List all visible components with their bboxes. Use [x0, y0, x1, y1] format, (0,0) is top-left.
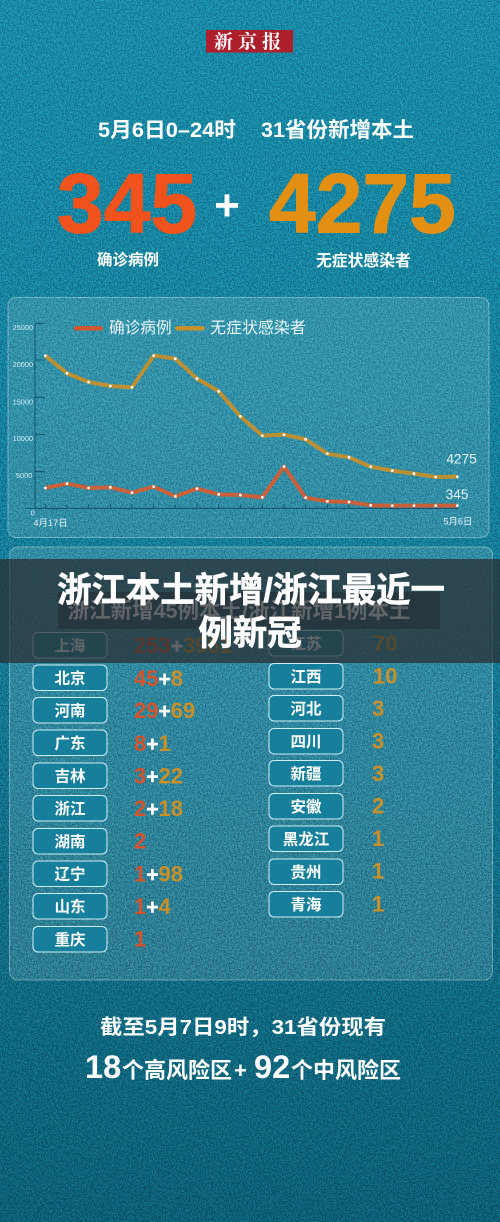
- x axis labels: 4月17日: [33, 518, 68, 528]
- row: 青海: 1: [372, 892, 384, 916]
- end label: 4275: 4275: [446, 451, 477, 466]
- plus sign: +: [214, 181, 240, 230]
- row: 河南: [33, 698, 195, 723]
- row: 四川: 3: [372, 728, 384, 754]
- row: 辽宁: 1+98: [134, 862, 183, 886]
- row: 广东: [33, 730, 171, 756]
- footer: risk area summary: [85, 1016, 401, 1085]
- row: 湖南: [33, 828, 146, 854]
- caption: asymptomatic: 无症状感染者: [316, 251, 411, 270]
- row: 重庆: 1: [134, 926, 146, 952]
- row: 北京: 北京: [54, 668, 86, 688]
- row: 上海: [33, 632, 232, 658]
- legend: 无症状感染者: [210, 319, 306, 337]
- row: 广东: 广东: [54, 734, 86, 752]
- row: 四川: 四川: [290, 734, 322, 751]
- row: 江西: 10: [373, 664, 397, 688]
- footer line 2: +: [234, 1058, 247, 1083]
- row: 上海: 253+3961: [134, 633, 232, 658]
- row: 山东: [33, 894, 172, 919]
- row: 安徽: 2: [372, 794, 384, 818]
- x axis labels: 5月6日: [443, 517, 472, 527]
- footer line 2: 个高风险区: [122, 1058, 232, 1083]
- y axis labels: 15000: [13, 397, 33, 406]
- row: 河南: 29+69: [134, 698, 195, 723]
- axes: [25, 323, 458, 508]
- panel: line chart background: [8, 298, 489, 538]
- heading: date and scope: 5月6日0–24时: [98, 119, 236, 142]
- y axis labels: 5000: [16, 471, 32, 480]
- row: 江苏: [269, 630, 397, 656]
- row: 黑龙江: 黑龙江: [283, 830, 330, 848]
- row: 江西: [269, 664, 397, 689]
- row: 河北: [269, 696, 384, 721]
- end label: 345: 345: [446, 487, 469, 502]
- footer line 2: 92: [254, 1049, 290, 1085]
- overlay title: 浙江本土新增/浙江最近一: [57, 572, 445, 610]
- row: 北京: 45+8: [134, 666, 183, 691]
- row: 贵州: 贵州: [290, 864, 322, 882]
- subtitle bar: [58, 592, 440, 629]
- line chart: [13, 319, 477, 528]
- row: 浙江: [33, 796, 183, 821]
- row: 黑龙江: 1: [372, 826, 384, 851]
- row: 山东: 山东: [54, 897, 86, 916]
- logo: 新京报: 新京报: [214, 27, 286, 54]
- row: 四川: [269, 728, 384, 754]
- row: 吉林: 吉林: [54, 768, 86, 786]
- row: 江西: 江西: [290, 668, 322, 686]
- row: 北京: [33, 665, 183, 691]
- heading: date and scope: [98, 118, 414, 142]
- number: confirmed 345: 345: [57, 156, 197, 250]
- row: 河北: 3: [372, 696, 384, 721]
- row: 安徽: [269, 794, 384, 819]
- row: 重庆: 重庆: [54, 930, 86, 949]
- right column: provinces with counts: [269, 630, 397, 917]
- y axis labels: [13, 323, 35, 518]
- row: 新疆: 3: [372, 761, 384, 786]
- line: confirmed: [45, 467, 457, 506]
- row: 江苏: 70: [373, 631, 397, 656]
- row: 吉林: [33, 763, 183, 788]
- number: asymptomatic 4275: 4275: [269, 156, 456, 250]
- row: 山东: 1+4: [134, 894, 172, 919]
- footer line 1: 截至5月7日9时，31省份现有: [100, 1016, 386, 1039]
- overlay title: 例新冠: [198, 615, 302, 653]
- row: 浙江: 2+18: [134, 796, 183, 821]
- y axis labels: 0: [31, 509, 35, 518]
- subtitle bar: 浙江新增45例本土/浙江新增1例本土: [68, 599, 410, 623]
- x axis labels: [33, 517, 472, 528]
- row: 湖南: 2: [134, 828, 146, 854]
- caption: confirmed cases: 确诊病例: [97, 250, 159, 269]
- row: 广东: 8+1: [134, 731, 171, 756]
- big numbers: confirmed plus asymptomatic: [57, 156, 456, 250]
- left column: provinces with confirmed and asymptomatic counts: [33, 632, 232, 952]
- row: 黑龙江: [269, 826, 384, 852]
- row: 湖南: 湖南: [54, 833, 86, 851]
- footer line 2: 个中风险区: [291, 1058, 401, 1083]
- heading: date and scope: 31省份新增本土: [261, 118, 414, 142]
- row: 青海: [269, 892, 384, 917]
- y axis labels: 20000: [13, 360, 33, 369]
- row: 新疆: 新疆: [290, 764, 322, 783]
- y axis labels: 25000: [13, 323, 33, 332]
- panel: province list background: [10, 547, 492, 980]
- row: 河北: 河北: [290, 700, 322, 718]
- row: 贵州: [269, 858, 384, 884]
- footer line 2: 18: [85, 1049, 121, 1085]
- legend: [76, 319, 306, 337]
- row: 浙江: 浙江: [54, 800, 86, 818]
- row: 辽宁: [33, 861, 183, 886]
- row: 辽宁: 辽宁: [54, 864, 86, 884]
- row: 河南: 河南: [54, 702, 86, 720]
- overlay title: [57, 572, 445, 653]
- row: 青海: 青海: [290, 896, 322, 914]
- row: 上海: 上海: [54, 637, 86, 655]
- legend: 确诊病例: [109, 319, 172, 337]
- line: asymptomatic: [45, 356, 457, 477]
- y axis labels: 10000: [13, 434, 33, 443]
- row: 新疆: [269, 760, 384, 786]
- overlay band: [0, 559, 500, 663]
- row: 江苏: 江苏: [290, 634, 322, 653]
- row: 安徽: 安徽: [290, 798, 322, 816]
- row: 贵州: 1: [372, 858, 384, 884]
- row: 吉林: 3+22: [134, 764, 183, 788]
- row: 重庆: [33, 926, 146, 952]
